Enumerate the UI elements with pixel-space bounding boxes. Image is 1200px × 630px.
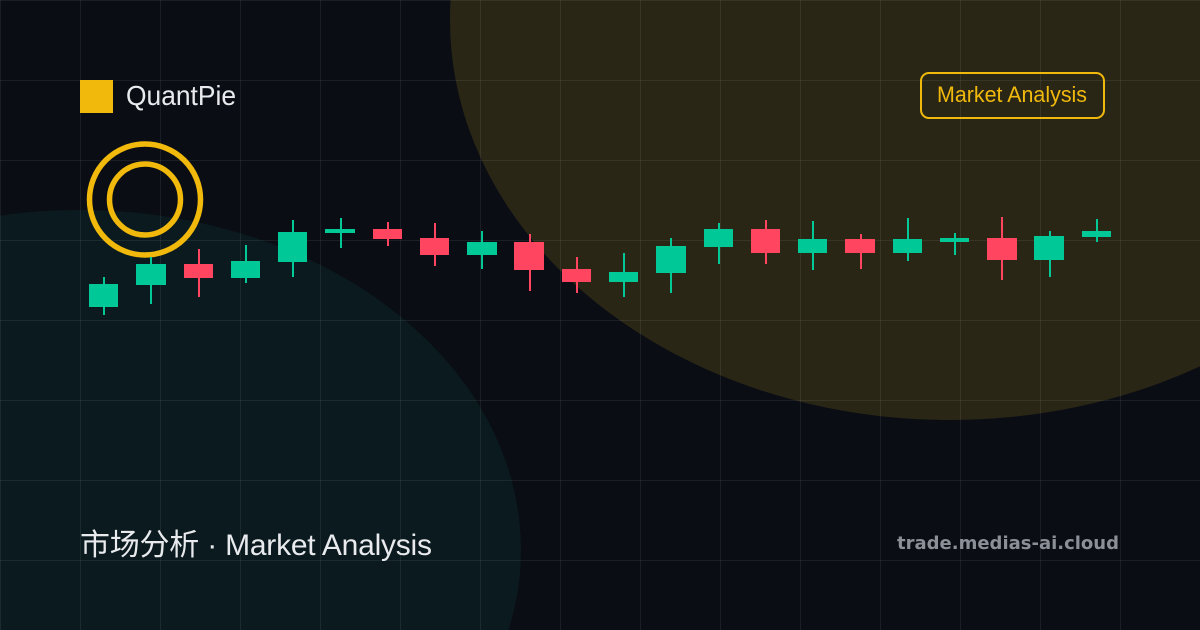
background blob: yellow ellipse	[450, 0, 1200, 420]
logo square	[80, 80, 113, 113]
logo wordmark: QuantPie	[126, 80, 236, 111]
background blob: teal ellipse	[0, 210, 521, 630]
candlestick chart	[89, 217, 1111, 315]
icon: concentric rings	[90, 144, 200, 255]
title: market analysis: 市场分析 · Market Analysis	[80, 529, 432, 562]
site url: trade.medias-ai.cloud	[897, 533, 1119, 554]
badge: Market Analysis: Market Analysis	[937, 82, 1087, 107]
badge: Market Analysis	[921, 73, 1104, 118]
